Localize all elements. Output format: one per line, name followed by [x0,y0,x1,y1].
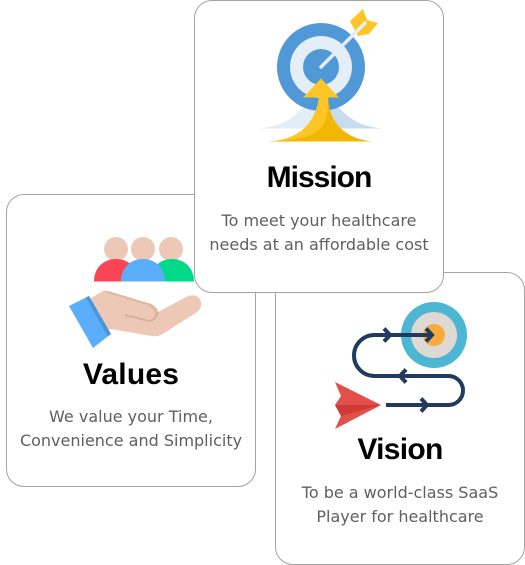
panel: mission [194,0,444,293]
text: vision description: Player for healthcare [316,507,484,526]
text: mission description: needs at an affordable cost [209,235,429,254]
icon: winding path to target [335,302,467,429]
text: values description: We value your Time, [49,407,213,426]
text: vision description: To be a world-class SaaS [302,483,498,502]
text: vision description [302,483,498,526]
panel: vision [275,272,525,565]
heading: Vision: Vision [357,433,443,466]
text: values description: Convenience and Simplicity [20,431,242,450]
icon: people over open hand [69,237,202,348]
heading: Mission: Mission [267,161,371,194]
heading: Values: Values [83,358,179,391]
icon: target with arrow [260,9,382,142]
text: mission description [209,211,429,254]
text: values description [20,407,242,450]
panel: values [6,194,256,487]
text: mission description: To meet your healthcare [222,211,416,230]
